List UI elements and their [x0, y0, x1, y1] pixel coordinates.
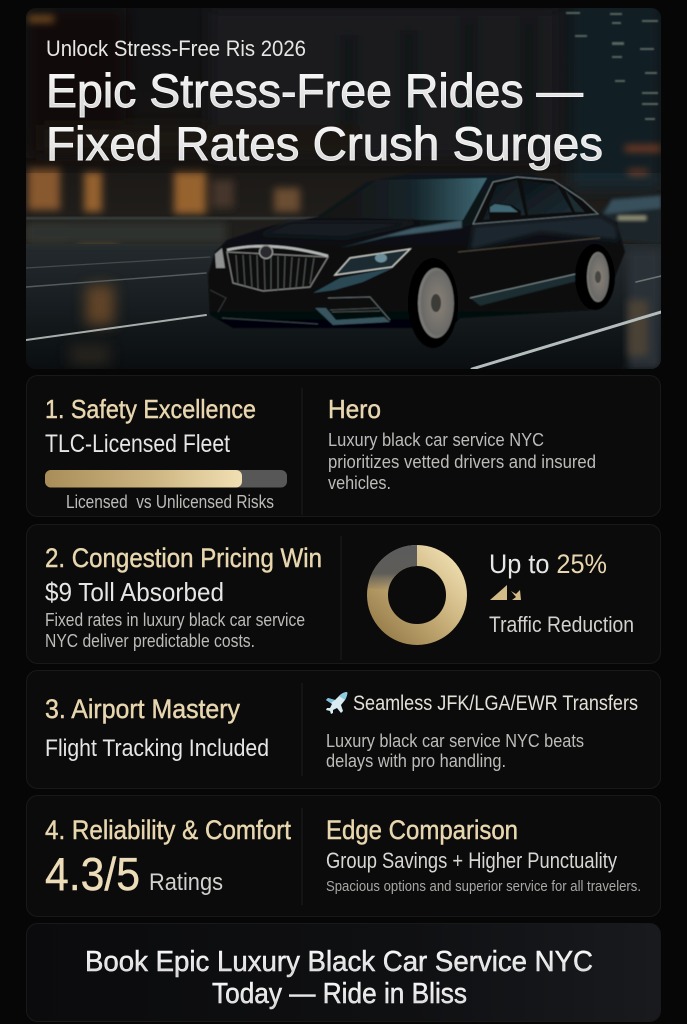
- heading: airport: 3. Airport Mastery: [45, 694, 240, 724]
- call to action text: Today — Ride in Bliss: [212, 978, 467, 1010]
- heading: reliability: 4. Reliability & Comfort: [45, 815, 291, 845]
- icon: blurred orange lights: [28, 16, 661, 250]
- left headlight: [215, 248, 225, 268]
- call to action text: Book Epic Luxury Black Car Service NYC: [85, 946, 593, 978]
- icon: airplane: [326, 692, 347, 714]
- bar label: Licensed vs Unlicensed Risks: [66, 492, 274, 512]
- progress bar: [45, 470, 287, 488]
- congestion description: NYC deliver predictable costs.: [45, 631, 255, 651]
- airport description: Luxury black car service NYC beats: [326, 731, 584, 751]
- panel: safety excellence: [26, 376, 660, 516]
- heading: transfers: Seamless JFK/LGA/EWR Transfers: [353, 691, 638, 715]
- donut chart: [368, 545, 456, 634]
- hero description: vehicles.: [328, 473, 391, 493]
- rating value: 4.3/5: [45, 848, 140, 900]
- side mirror: [488, 203, 521, 220]
- bumper accents: [313, 268, 393, 293]
- call to action text: [85, 946, 593, 1010]
- side window frame: [473, 177, 598, 224]
- comparison description: Spacious options and superior service for all travelers.: [326, 878, 641, 895]
- rear wheel: [575, 244, 615, 310]
- heading: edge comparison: Edge Comparison: [326, 815, 518, 845]
- hero subtitle: Unlock Stress-Free Ris 2026: [46, 36, 306, 61]
- panel: reliability and comfort: [26, 796, 660, 916]
- panel: call to action: [26, 924, 660, 1022]
- hero description: Luxury black car service NYC: [328, 430, 544, 450]
- subheading: fleet: TLC-Licensed Fleet: [45, 430, 230, 458]
- hood highlights: [260, 222, 420, 238]
- grille: [227, 252, 328, 291]
- heading: hero: Hero: [328, 394, 381, 424]
- icon: distant car: [600, 194, 661, 244]
- congestion description: Fixed rates in luxury black car service: [45, 610, 305, 630]
- door reflections: [470, 216, 618, 250]
- stat label: Traffic Reduction: [489, 612, 634, 637]
- windshield: [323, 178, 487, 220]
- panel: congestion pricing: [26, 524, 660, 664]
- icon: black sedan: [208, 172, 625, 348]
- road: [26, 244, 661, 369]
- emblem: [260, 246, 272, 258]
- front wheel: [408, 258, 458, 348]
- hero title: Fixed Rates Crush Surges: [46, 117, 603, 170]
- hero description: [328, 430, 596, 493]
- icon: trend arrows: [490, 585, 521, 600]
- hero panel: [26, 0, 661, 369]
- hero title: Epic Stress-Free Rides —: [46, 64, 583, 117]
- stat: up to 25%: Up to 25%: [489, 549, 607, 579]
- subheading: group savings: Group Savings + Higher Punctuality: [326, 848, 617, 873]
- heading: congestion: 2. Congestion Pricing Win: [45, 543, 322, 573]
- rating label: Ratings: [149, 869, 223, 896]
- congestion description: [45, 610, 305, 651]
- headlight: [335, 249, 410, 275]
- hero description: prioritizes vetted drivers and insured: [328, 452, 596, 472]
- airport description: [326, 731, 584, 771]
- vignette on hero top: [26, 8, 661, 173]
- subheading: flight tracking: Flight Tracking Included: [45, 735, 269, 762]
- panel: airport mastery: [26, 670, 660, 788]
- icon: lane lines: [26, 257, 661, 369]
- airport description: delays with pro handling.: [326, 751, 506, 771]
- icon: lit tower windows: [566, 12, 658, 120]
- subheading: toll: $9 Toll Absorbed: [45, 577, 224, 607]
- heading: safety: 1. Safety Excellence: [45, 394, 256, 424]
- icon: blurred city buildings: [26, 0, 661, 190]
- hero title: [46, 64, 603, 170]
